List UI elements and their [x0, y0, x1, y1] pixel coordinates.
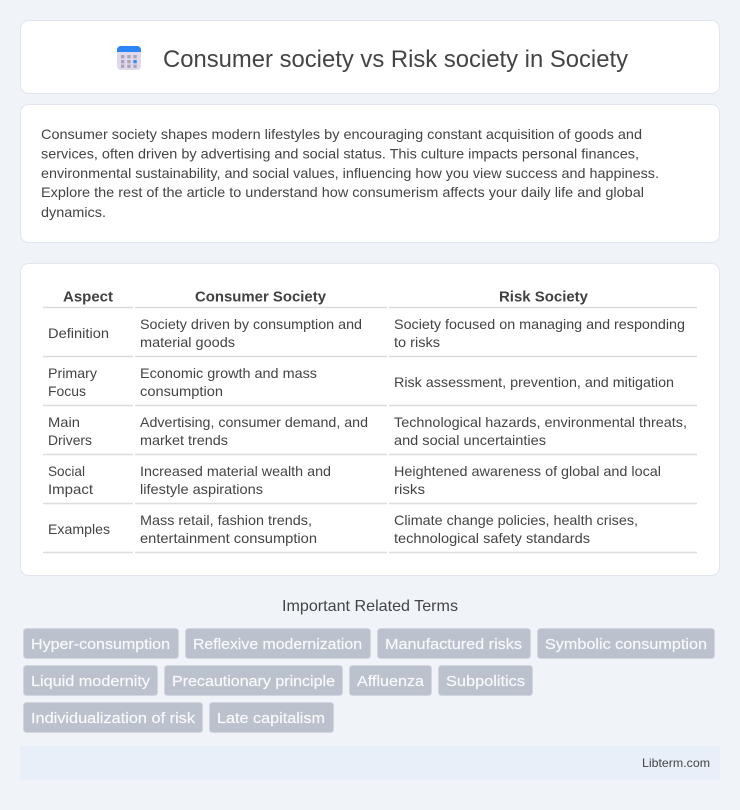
tag: Precautionary principle	[172, 673, 335, 690]
intro text: Consumer society shapes modern lifestyles by encouraging constant acquisition of goods and	[41, 126, 642, 142]
tag	[24, 628, 178, 658]
tag: Reflexive modernization	[193, 636, 362, 653]
row: social impact: lifestyle aspirations	[140, 481, 263, 497]
tag	[350, 666, 432, 696]
row: examples: technological safety standards	[394, 530, 590, 546]
row: definition: to risks	[394, 334, 440, 350]
row: social impact: Impact	[48, 481, 93, 497]
row: primary focus: Risk assessment, prevention, and mitigation	[394, 374, 674, 390]
footer	[20, 746, 720, 780]
row: primary focus: Primary	[48, 365, 97, 381]
heading: important related terms: Important Related Terms	[282, 598, 458, 615]
row: examples: Climate change policies, health crises,	[394, 512, 638, 528]
tag: Symbolic consumption	[545, 636, 707, 653]
row: examples: Examples	[48, 521, 110, 537]
row: main drivers: Advertising, consumer demand, and	[140, 414, 368, 430]
row: main drivers: Main	[48, 414, 80, 430]
row: main drivers	[48, 414, 687, 448]
related terms tags	[24, 628, 714, 732]
tag: Liquid modernity	[31, 673, 151, 690]
table header: Aspect	[63, 290, 113, 306]
intro text	[41, 126, 659, 220]
row: examples: entertainment consumption	[140, 530, 317, 546]
tag	[378, 628, 530, 658]
row: main drivers: market trends	[140, 432, 228, 448]
tag	[24, 666, 158, 696]
row: social impact: Increased material wealth and	[140, 463, 331, 479]
tag	[186, 628, 370, 658]
row: definition: Society driven by consumption and	[140, 316, 362, 332]
intro text: dynamics.	[41, 204, 106, 220]
tag: Manufactured risks	[385, 636, 522, 653]
panel: comparison table	[20, 264, 720, 576]
row: definition: material goods	[140, 334, 235, 350]
row: primary focus	[48, 365, 674, 399]
row: social impact: Social	[48, 463, 85, 479]
tag: Individualization of risk	[31, 710, 196, 727]
row: social impact	[48, 463, 661, 497]
intro text: environmental sustainability, and social values, influencing how you view success and happiness.	[41, 165, 659, 181]
footer source text: Libterm.com	[642, 756, 710, 770]
tag	[438, 666, 532, 696]
table header: Consumer Society	[195, 290, 326, 306]
tag: Hyper-consumption	[31, 636, 170, 653]
row: examples: Mass retail, fashion trends,	[140, 512, 312, 528]
row: primary focus: Economic growth and mass	[140, 365, 317, 381]
tag	[164, 666, 342, 696]
intro text: services, often driven by advertising and social status. This culture impacts personal finances,	[41, 146, 639, 162]
tag	[210, 702, 334, 732]
icon: calendar	[117, 46, 141, 70]
row: main drivers: Technological hazards, environmental threats,	[394, 414, 687, 430]
row: primary focus: Focus	[48, 383, 86, 399]
row: social impact: Heightened awareness of global and local	[394, 463, 661, 479]
row: definition: Definition	[48, 325, 109, 341]
tag: Subpolitics	[446, 673, 525, 690]
row: primary focus: consumption	[140, 383, 223, 399]
row: main drivers: Drivers	[48, 432, 92, 448]
row: definition	[48, 316, 685, 350]
row: main drivers: and social uncertainties	[394, 432, 546, 448]
tag	[24, 702, 202, 732]
intro text: Explore the rest of the article to understand how consumerism affects your daily life and global	[41, 184, 644, 200]
tag	[538, 628, 714, 658]
tag: Late capitalism	[217, 710, 325, 727]
table header: Risk Society	[499, 290, 588, 306]
panel: header	[20, 20, 720, 94]
table header	[63, 290, 588, 306]
title: Consumer society vs Risk society in Society	[163, 46, 628, 73]
tag: Affluenza	[357, 673, 425, 690]
panel: introduction	[20, 104, 720, 242]
row: social impact: risks	[394, 481, 425, 497]
row: definition: Society focused on managing and responding	[394, 316, 685, 332]
row: examples	[48, 512, 638, 546]
